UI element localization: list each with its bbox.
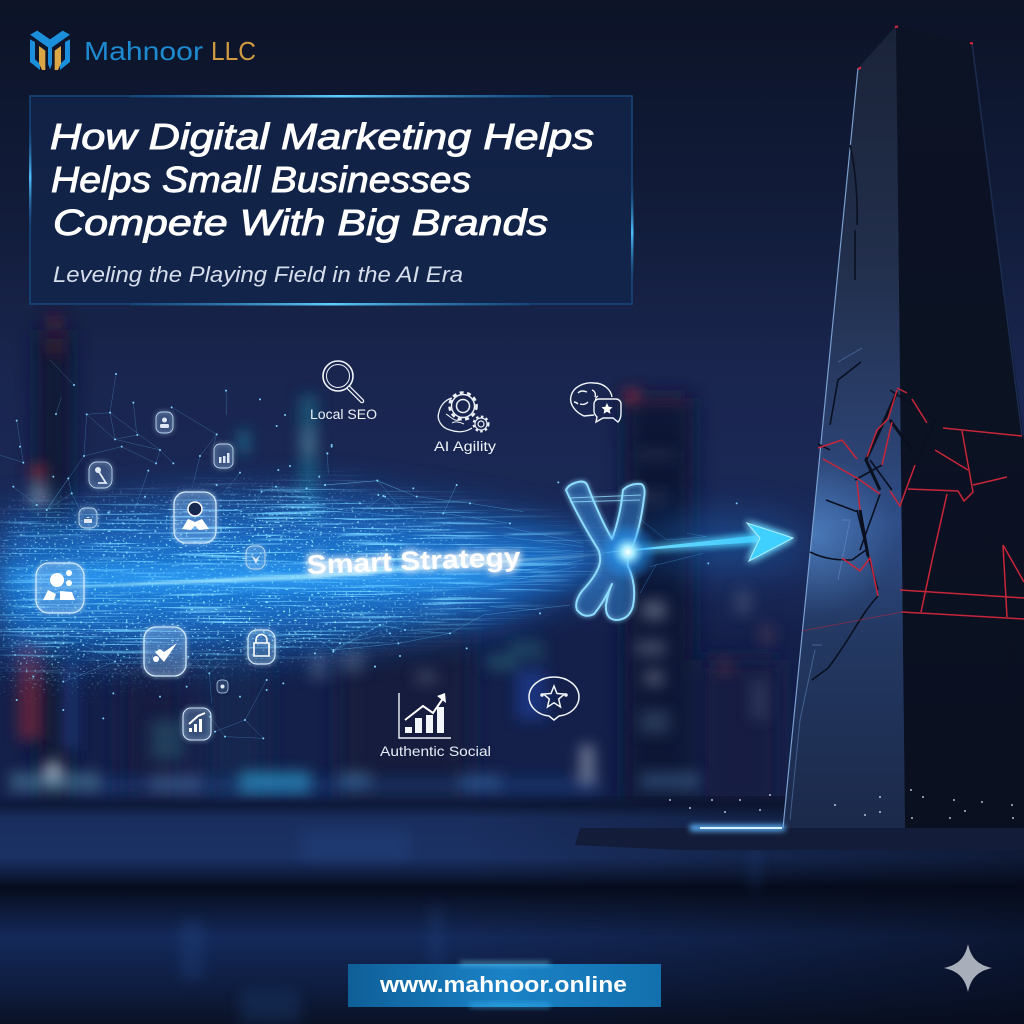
logo wordmark gold: LLC [211,36,256,66]
label: Authentic Social: Authentic Social [380,743,491,759]
glass icon: small lock [79,508,97,528]
icon: brain and chat bubble [571,383,621,422]
sparkle watermark [944,944,992,992]
chromosome X [566,482,645,620]
website button [348,962,661,1007]
panel top glow [130,95,550,98]
url: www.mahnoor.online [379,972,627,997]
arrow shaft [600,534,772,553]
faint red line [802,612,902,631]
icon: gears with AI Agility label [434,392,496,454]
glass icon: tiny badge [217,680,228,693]
blurred city skyline [10,315,780,810]
stream inner glow [0,540,600,620]
stream bright filament [0,552,630,590]
logo mark [30,31,70,70]
base highlight [700,827,782,829]
cracked obelisk [575,26,1024,850]
label: Local SEO: Local SEO [310,407,377,422]
logo [30,31,256,70]
title panel [29,95,634,306]
glass icon: checkmark [144,627,186,676]
glass icon: profile [156,412,173,433]
red fracture lines [818,388,1024,619]
base sparks [670,790,1013,818]
title: How Digital Marketing Helps [50,116,594,157]
arrow halo [630,516,810,568]
stream wide glow [0,495,625,655]
button top glow [460,962,550,965]
glass icon: heart node [246,546,265,569]
icon: magnifier with Local SEO label [310,361,377,422]
background gradient [0,0,1024,815]
glass icon: lock [248,630,275,664]
obelisk lit edge [783,68,858,828]
obelisk base [575,828,1024,850]
obelisk right edge [972,43,1022,435]
title: Compete With Big Brands [53,202,548,243]
icon: growth chart with Authentic Social label [380,693,491,759]
base glow [690,825,785,831]
stream core [0,565,520,591]
label: Smart Strategy: Smart Strategy [306,542,521,580]
arrow head [747,523,793,561]
network lines and nodes [0,360,400,738]
logo wordmark blue: Mahnoor [84,36,203,66]
label: AI Agility: AI Agility [434,439,496,454]
thicker dark crack [860,392,912,556]
icon: star speech bubble [529,677,579,720]
obelisk shadow face [896,26,1024,828]
stream streak texture [0,490,625,660]
upper-right network over stream [273,447,737,667]
button bottom glow [470,1004,550,1007]
subtitle: Leveling the Playing Field in the AI Era [53,262,463,287]
top red corners [858,26,973,69]
glass icon: bar chart [214,444,233,468]
panel left glow [29,125,32,230]
panel bottom glow [130,303,530,306]
dark cracks [810,145,1024,700]
panel box [30,96,632,304]
stream speckle texture [0,495,480,685]
data stream [0,490,630,685]
faint lit scratches [790,348,862,820]
glass icon: team [36,563,84,613]
title [50,116,594,243]
glass icon: rising chart [183,708,211,740]
reflective floor [0,796,1024,1024]
obelisk lit face [783,26,905,828]
glass icon: microphone [89,462,112,488]
obelisk lit glow [783,26,905,828]
title: Helps Small Businesses [51,159,471,200]
glass icon: support agent [174,492,216,543]
arrow of strategy through chromosome [566,482,810,620]
panel right glow [631,180,634,285]
impact flare [598,522,658,582]
